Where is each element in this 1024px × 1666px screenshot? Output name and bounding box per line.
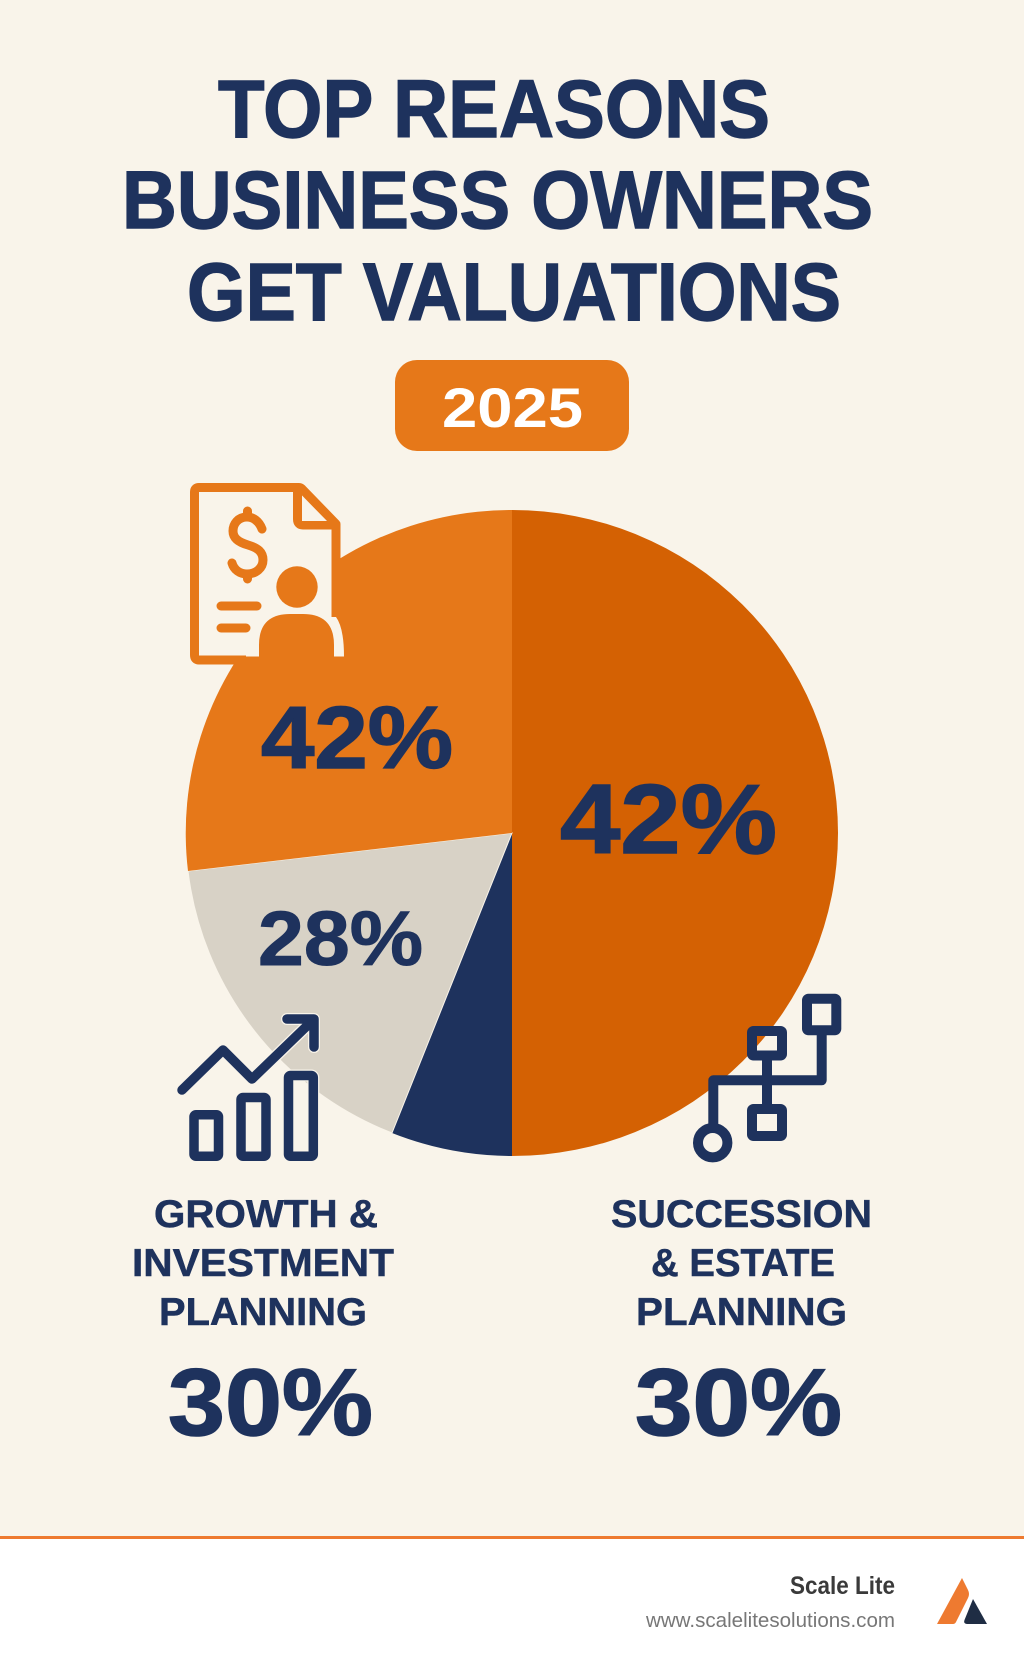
- year badge: 2025: [442, 376, 583, 439]
- pie slice: navy: [392, 833, 512, 1156]
- title: TOP REASONS: [218, 64, 770, 155]
- label: succession and estate planning: SUCCESSION: [611, 1193, 872, 1236]
- pie chart: [186, 510, 838, 1156]
- label: succession and estate planning: PLANNING: [636, 1291, 847, 1334]
- pie slice: beige: [188, 833, 512, 1133]
- year badge: [395, 360, 629, 451]
- footer url: www.scalelitesolutions.com: [645, 1609, 895, 1632]
- label: growth and investment planning: GROWTH &: [154, 1193, 378, 1236]
- title: [122, 64, 873, 338]
- icon: valuation document with person: [194, 488, 344, 660]
- pie label: 28%: 28%: [258, 896, 423, 982]
- icon: succession flow diagram: [698, 999, 836, 1157]
- label: succession and estate planning: & ESTATE: [651, 1242, 835, 1285]
- pie slice: orange: [186, 510, 512, 871]
- footer: [0, 1536, 1024, 1666]
- stat: succession 30%: 30%: [635, 1350, 842, 1456]
- pie label: right 42%: 42%: [560, 764, 777, 874]
- icon: growth chart with arrow: [182, 1019, 314, 1156]
- pie label: left 42%: 42%: [261, 688, 453, 787]
- title: BUSINESS OWNERS: [122, 155, 873, 246]
- title: GET VALUATIONS: [187, 247, 841, 338]
- stat: growth 30%: 30%: [168, 1350, 373, 1456]
- footer brand name: Scale Lite: [790, 1572, 895, 1600]
- label: succession and estate planning: [611, 1193, 872, 1334]
- label: growth and investment planning: PLANNING: [159, 1291, 367, 1334]
- label: growth and investment planning: [132, 1193, 394, 1334]
- pie slice: dark orange right half: [512, 510, 838, 1156]
- label: growth and investment planning: INVESTMENT: [132, 1242, 394, 1285]
- icon: scale lite logo: [937, 1578, 987, 1624]
